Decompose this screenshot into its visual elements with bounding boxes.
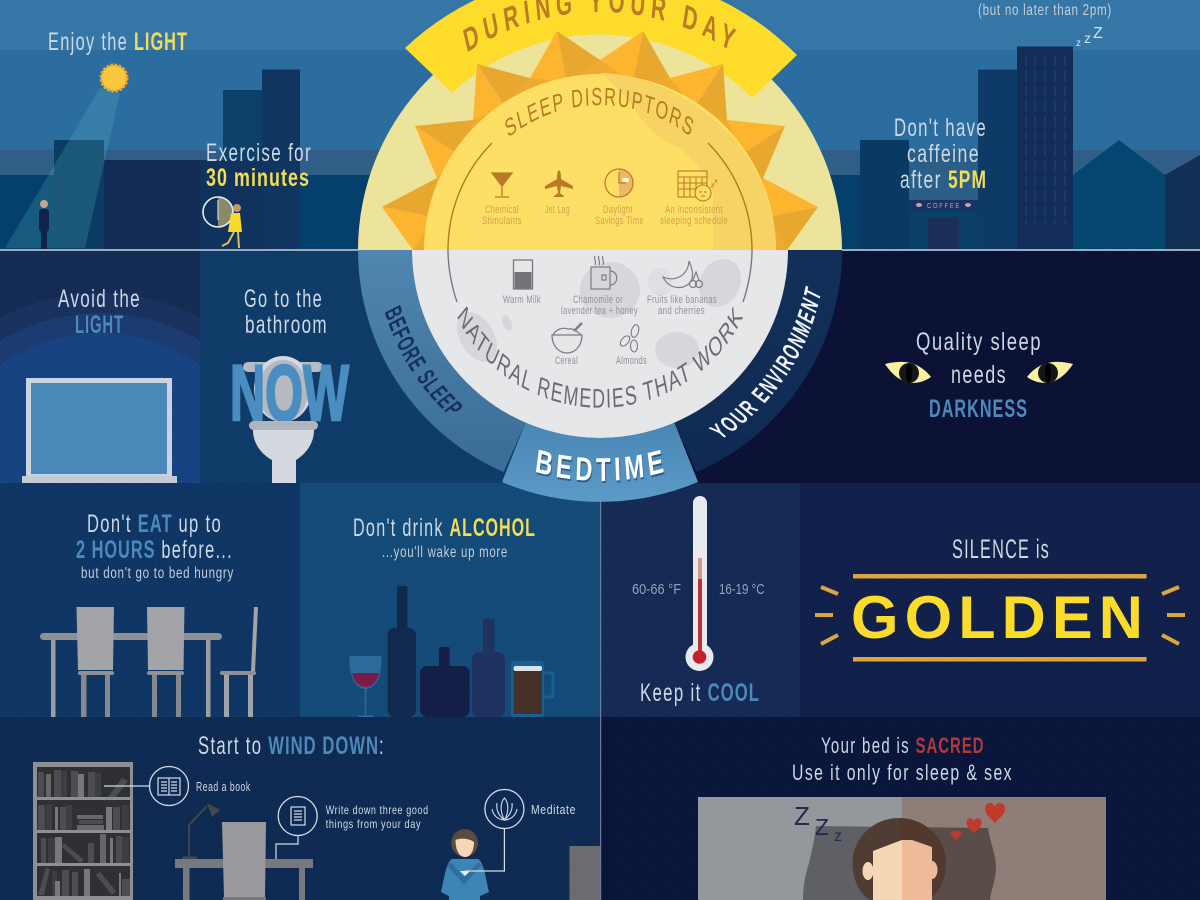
icon: coffee shop sign and door — [910, 200, 978, 250]
panel: food, alcohol, temperature and silence backgrounds — [0, 483, 1200, 717]
text: Meditate: Meditate — [531, 802, 576, 817]
panel: your environment ring — [674, 250, 842, 472]
icon: sleeping Z letters: Z — [815, 814, 829, 840]
icon: sleeping Z letters — [794, 801, 842, 845]
text: Don't drink ALCOHOL — [353, 514, 536, 561]
text: temperature ranges: 16-19 °C — [719, 581, 765, 598]
panel: sun rays and yellow half circle — [382, 31, 818, 250]
text: Don't EAT up to 2 HOURS before: Don't EAT up to — [87, 510, 222, 538]
icon: read a book callout — [104, 766, 188, 806]
icon: banana and cherries — [663, 261, 702, 288]
text: Exercise for 30 minutes — [206, 139, 312, 192]
icon: bookshelf — [33, 762, 133, 900]
text: Don't EAT up to 2 HOURS before — [76, 510, 234, 582]
text: Keep it COOL: Keep it COOL — [640, 679, 760, 707]
text: temperature ranges: 60-66 °F — [632, 581, 681, 598]
icon: sleeping zzz above tower: z — [1084, 30, 1091, 46]
icon: tea mug — [591, 256, 617, 289]
icon: cereal bowl — [552, 323, 582, 353]
text: Write down three good things from your day: things from your day — [326, 817, 421, 831]
icon: sleeping zzz above tower — [1076, 25, 1103, 49]
text: Don't drink ALCOHOL: Don't drink ALCOHOL — [353, 514, 536, 542]
icon: write down callout — [276, 796, 317, 859]
text: Write down three good things from your day: Write down three good — [326, 803, 429, 817]
text: Quality sleep needs DARKNESS — [916, 328, 1042, 423]
heading: Start to WIND DOWN: Start to WIND DOWN: — [198, 732, 385, 760]
text: Exercise for 30 minutes: 30 minutes — [206, 164, 310, 192]
panel: left city skyline — [54, 70, 300, 250]
text: remedy labels: Fruits like bananas — [647, 294, 717, 306]
icon: bed with sleeping face — [698, 797, 1106, 900]
icon: left cat eye — [885, 362, 931, 383]
text: Your bed is SACRED: Your bed is SACRED — [821, 733, 985, 758]
icon: airplane — [545, 170, 573, 197]
text: but no later than 2pm: (but no later than 2pm) — [978, 2, 1112, 19]
text: Don't have caffeine after 5PM — [894, 114, 987, 194]
panel: right city skyline — [860, 46, 1200, 250]
panel: before sleep ring — [358, 250, 526, 472]
icon: warm milk glass — [514, 260, 532, 289]
text: Go to the bathroom: Go to the — [244, 285, 323, 313]
panel: daytime sky — [0, 0, 1200, 250]
icon: sleeping zzz above tower: Z — [1093, 25, 1103, 42]
icon: grey cabinet edge — [570, 846, 600, 900]
text: Enjoy the LIGHT: Enjoy the LIGHT — [48, 28, 188, 56]
panel: your environment background — [600, 250, 1200, 483]
icon: almonds — [618, 324, 640, 352]
text: remedy labels: Cereal — [555, 355, 578, 367]
icon: desk, chair and lamp — [175, 803, 313, 900]
text: disruptor labels: sleeping schedule — [660, 215, 728, 227]
text: Exercise for 30 minutes: Exercise for — [206, 139, 312, 167]
icon: exercise clock and walking woman — [203, 197, 242, 248]
icon: red hearts — [951, 803, 1005, 840]
text: remedy labels: Chamomile or — [573, 294, 623, 306]
heading: SLEEP DISRUPTORS: SLEEP DISRUPTORS — [505, 88, 694, 136]
text: Avoid the LIGHT: Avoid the — [58, 285, 141, 313]
icon: right cat eye — [1027, 362, 1073, 383]
panel: wind down and bed backgrounds — [0, 717, 1200, 900]
text: Don't have caffeine after 5PM: caffeine — [907, 140, 980, 168]
text: Go to the bathroom: bathroom — [245, 311, 328, 339]
icon: calendar with sleepy face — [678, 171, 717, 201]
label: YOUR ENVIRONMENT: YOUR ENVIRONMENT — [708, 286, 820, 438]
icon: sleeping Z letters: z — [834, 828, 842, 845]
icon: sleeping zzz above tower: z — [1076, 38, 1081, 49]
text: disruptor labels: Daylight — [603, 204, 633, 216]
text: disruptor labels: Stimulants — [482, 215, 522, 227]
banner: BEDTIME — [502, 422, 698, 502]
text: remedy labels: Almonds — [616, 355, 647, 367]
icon: thermometer — [686, 496, 714, 671]
text: Don't EAT up to 2 HOURS before: but don't go to bed hungry — [81, 565, 234, 582]
text: Your bed is SACRED: Use it only for sleep & sex — [792, 760, 1013, 785]
text: remedy labels: lavender tea + honey — [561, 305, 638, 317]
heading: NATURAL REMEDIES THAT WORK: NATURAL REMEDIES THAT WORK — [457, 306, 744, 408]
text: disruptor labels: An inconsistent — [665, 204, 723, 216]
text: disruptor labels: Chemical — [485, 204, 519, 216]
panel: pale sun disc — [358, 8, 842, 250]
icon: toilet with NOW: NOW — [230, 348, 349, 437]
icon: dining table and chairs — [40, 607, 258, 717]
text: disruptor labels — [482, 204, 728, 227]
panel: before sleep backgrounds — [0, 251, 596, 483]
icon: man standing in the light — [39, 200, 49, 250]
callout: GOLDEN with rays and rules: GOLDEN — [851, 584, 1149, 651]
text: Don't have caffeine after 5PM: after 5PM — [900, 166, 987, 194]
text: remedy labels: Warm Milk — [503, 294, 541, 306]
panel: natural remedies white half circle — [412, 250, 788, 438]
icon: martini — [492, 173, 512, 197]
text: remedy labels — [503, 294, 717, 367]
text: SILENCE is: SILENCE is — [952, 534, 1050, 564]
text: Avoid the LIGHT — [58, 285, 141, 339]
icon: daylight clock — [605, 169, 633, 197]
text: disruptor labels: Jet Lag — [545, 204, 570, 216]
icon: toilet with NOW — [230, 348, 349, 483]
text: Avoid the LIGHT: LIGHT — [75, 311, 124, 339]
text: Quality sleep needs DARKNESS: DARKNESS — [929, 395, 1028, 423]
text: Don't have caffeine after 5PM: Don't have — [894, 114, 987, 142]
text: Don't drink ALCOHOL: ...you'll wake up more — [382, 544, 508, 561]
decorative arc line: upper bracket — [448, 143, 752, 250]
icon: meditating person — [441, 829, 489, 900]
text: Quality sleep needs DARKNESS: Quality sleep — [916, 328, 1042, 356]
text: temperature ranges — [632, 581, 765, 598]
label: BEFORE SLEEP: BEFORE SLEEP — [385, 305, 462, 412]
callout: GOLDEN with rays and rules — [815, 574, 1185, 662]
text: Your bed is SACRED — [792, 733, 1013, 785]
text: Go to the bathroom — [244, 285, 328, 339]
text: Read a book: Read a book — [196, 779, 251, 794]
text: Don't EAT up to 2 HOURS before: 2 HOURS before... — [76, 536, 233, 564]
text: remedy labels: and cherries — [658, 305, 705, 317]
text: Quality sleep needs DARKNESS: needs — [951, 361, 1007, 389]
banner: BEDTIME: BEDTIME — [536, 450, 664, 483]
text: disruptor labels: Savings Time — [595, 215, 644, 227]
icon: sun with light beam — [5, 65, 127, 248]
icon: laptop — [22, 380, 177, 483]
icon: wine glass, bottles and beer mug — [349, 586, 553, 717]
icon: coffee shop sign and door: COFFEE — [927, 203, 961, 210]
banner: DURING YOUR DAY — [405, 0, 797, 98]
icon: meditate callout — [465, 790, 524, 871]
icon: sleeping Z letters: Z — [794, 801, 810, 831]
text: Write down three good things from your day — [326, 803, 429, 831]
